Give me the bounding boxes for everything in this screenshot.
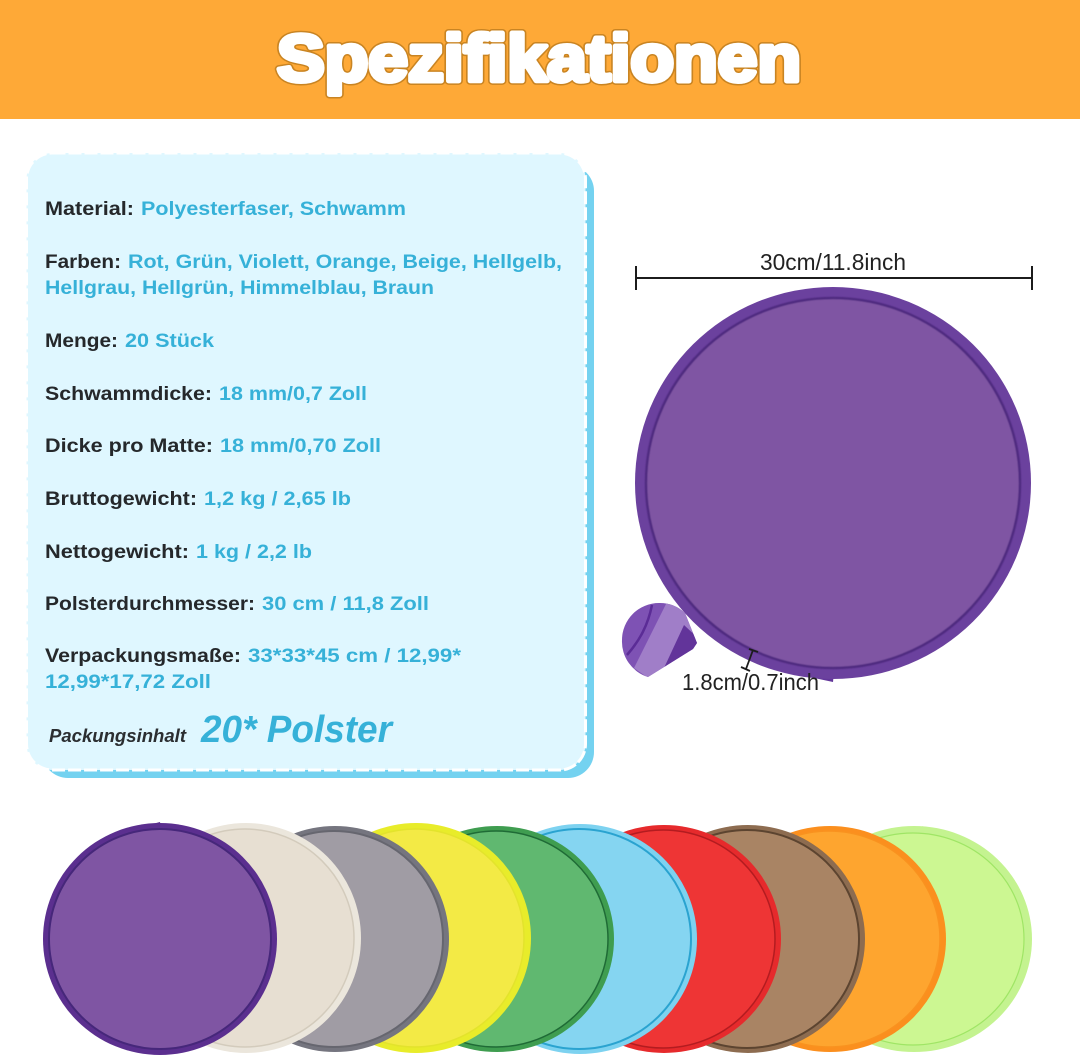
spec: gross weight: 1,2 kg / 2,65 lb xyxy=(204,489,351,510)
spec: package size: 33*33*45 cm / 12,99* xyxy=(248,646,462,667)
spec: net weight: 1 kg / 2,2 lb xyxy=(196,542,312,563)
spec: gross weight xyxy=(45,489,351,510)
inset: seam close-up xyxy=(622,603,697,677)
cushion: green xyxy=(380,826,614,1052)
spec: cushion diameter: Polsterdurchmesser: xyxy=(45,594,255,615)
cushion: beige xyxy=(131,823,361,1053)
spec: quantity: 20 Stück xyxy=(125,331,214,352)
spec: sponge thickness: 18 mm/0,7 Zoll xyxy=(219,384,367,405)
cushion: orange xyxy=(714,826,946,1052)
spec: gross weight: Bruttogewicht: xyxy=(45,489,197,510)
seam thickness marker xyxy=(682,649,819,695)
cushion: light grey xyxy=(221,826,449,1052)
colour row: ten cushions xyxy=(43,822,1032,1055)
package contents: 20* Polster xyxy=(200,709,394,751)
spec: colours: Hellgrau, Hellgrün, Himmelblau, Braun xyxy=(45,278,434,299)
spec: thickness per mat xyxy=(45,436,381,457)
title: Spezifikationen xyxy=(277,21,801,95)
spec: material: Material: xyxy=(45,199,134,220)
spec: quantity xyxy=(45,331,214,352)
package contents: Packungsinhalt xyxy=(49,725,187,746)
cushion: yellow xyxy=(301,823,531,1053)
diameter dimension line: 30cm/11.8inch xyxy=(760,249,906,275)
cushion: brown xyxy=(631,825,865,1053)
header banner xyxy=(0,0,1080,119)
panel shadow xyxy=(42,165,594,778)
panel background xyxy=(26,153,586,770)
spec: thickness per mat: Dicke pro Matte: xyxy=(45,436,213,457)
spec: material: Polyesterfaser, Schwamm xyxy=(141,199,406,220)
package contents xyxy=(49,709,394,751)
spec: thickness per mat: 18 mm/0,70 Zoll xyxy=(220,436,381,457)
title: Spezifikationen xyxy=(277,21,801,95)
spec: colours xyxy=(45,252,562,299)
spec: package size: 12,99*17,72 Zoll xyxy=(45,672,211,693)
spec: colours: Rot, Grün, Violett, Orange, Beige, Hellgelb, xyxy=(128,252,562,273)
diameter dimension line xyxy=(636,249,1032,290)
spec: net weight xyxy=(45,542,312,563)
spec: cushion diameter: 30 cm / 11,8 Zoll xyxy=(262,594,429,615)
spec: colours: Farben: xyxy=(45,252,121,273)
main purple cushion xyxy=(635,287,1031,682)
spec: package size xyxy=(45,646,462,693)
panel: specifications xyxy=(26,153,594,778)
spec: net weight: Nettogewicht: xyxy=(45,542,189,563)
spec: material xyxy=(45,199,406,220)
cushion: light green xyxy=(796,826,1032,1052)
spec: cushion diameter xyxy=(45,594,429,615)
cushion: red xyxy=(547,825,781,1053)
spec: quantity: Menge: xyxy=(45,331,118,352)
cushion: purple xyxy=(43,822,277,1055)
spec: package size: Verpackungsmaße: xyxy=(45,646,241,667)
cushion: sky blue xyxy=(463,824,697,1054)
spec: sponge thickness xyxy=(45,384,367,405)
spec: sponge thickness: Schwammdicke: xyxy=(45,384,212,405)
seam thickness marker: 1.8cm/0.7inch xyxy=(682,669,819,695)
